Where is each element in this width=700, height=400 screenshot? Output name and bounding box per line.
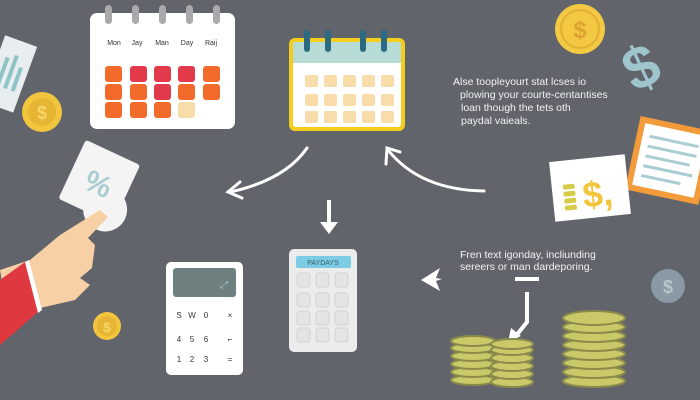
icon: coin left: [22, 92, 62, 132]
arrow: curved to left: [228, 148, 307, 198]
text block: bottom: Fren text igonday, incliunding: [460, 249, 596, 261]
arrow: curved from right: [386, 148, 484, 191]
calendar: weekly: Mon: [107, 40, 121, 47]
calculator: ⤢: [220, 280, 228, 291]
icon: small coin: $: [103, 319, 111, 335]
icon: dollar paper: $,: [581, 172, 615, 216]
calculator: S: [176, 311, 182, 320]
calendar: weekly: [90, 5, 235, 129]
icon: dollar paper: [549, 154, 631, 222]
calculator: =: [228, 355, 233, 364]
calendar: weekly: Man: [155, 40, 169, 47]
icon: orange framed document: [625, 116, 700, 205]
calculator: 1: [177, 355, 182, 364]
text block: top: loan though the tets oth: [461, 102, 571, 114]
calculator: 0: [204, 311, 209, 320]
text block: bottom: [460, 249, 596, 273]
calculator: ⌐: [228, 335, 233, 344]
text block: bottom: sereers or man dardeporing.: [460, 261, 592, 273]
text block: top: [453, 76, 608, 127]
icon: percent paper: %: [79, 164, 117, 205]
calculator: 4: [177, 335, 182, 344]
icon: document top left: [0, 35, 37, 113]
text block: top: plowing your courte-centantises: [460, 89, 608, 101]
arrow: down: [320, 200, 338, 234]
calculator: 6: [204, 335, 209, 344]
icon: percent paper: [53, 140, 148, 239]
calculator: W: [188, 311, 196, 320]
text block: top: paydal vaieals.: [461, 115, 530, 127]
coin stacks: [451, 311, 625, 387]
calendar: yellow: [289, 30, 405, 131]
icon: coin left: $: [37, 103, 47, 123]
icon: gray coin: $: [663, 277, 673, 297]
calculator: paydays: PAYDAYS: [307, 260, 339, 267]
calculator: 3: [204, 355, 209, 364]
icon: teal symbol: $: [612, 30, 670, 105]
calculator: ×: [228, 311, 233, 320]
icon: hand pointing: [0, 210, 108, 345]
icon: coin top right: [555, 4, 605, 54]
arrow: down to coins: [508, 277, 539, 342]
text block: top: Alse toopleyourt stat lcses io: [453, 76, 586, 88]
calculator: paydays: [289, 249, 357, 352]
arrow: left: [421, 268, 442, 291]
icon: small coin: [93, 312, 121, 340]
calculator: 5: [190, 335, 195, 344]
calendar: weekly: Day: [181, 40, 194, 47]
icon: gray coin: [651, 269, 685, 303]
icon: coin top right: $: [573, 17, 587, 44]
calculator: 2: [190, 355, 195, 364]
calendar: weekly: Raij: [205, 40, 217, 47]
calendar: weekly: Jay: [132, 40, 143, 47]
calculator: [166, 262, 243, 375]
